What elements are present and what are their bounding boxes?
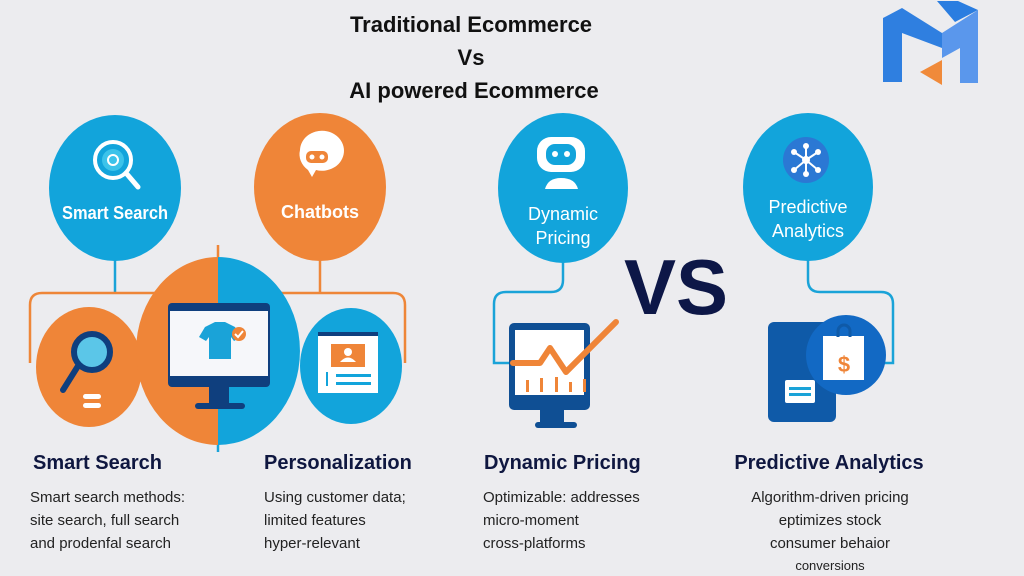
- circle: right small blue (profile): [300, 308, 402, 424]
- text: Predictive Analytics: Algorithm-driven pricing: [751, 489, 909, 506]
- text: Predictive Analytics: Predictive Analytics: [734, 452, 924, 474]
- text: Dynamic Pricing: micro-moment: [483, 512, 580, 529]
- title: AI powered Ecommerce: [349, 78, 599, 103]
- circle: Chatbots: Chatbots: [281, 202, 359, 222]
- text: Smart Search: [30, 452, 185, 552]
- text: Dynamic Pricing: Dynamic Pricing: [484, 452, 641, 474]
- text: Dynamic Pricing: cross-platforms: [483, 535, 586, 552]
- circle: Smart Search: [49, 115, 181, 261]
- connector lines left: [30, 245, 405, 452]
- text: Predictive Analytics: [734, 452, 924, 573]
- circle: Predictive Analytics: Predictive: [768, 197, 848, 217]
- text: Predictive Analytics: eptimizes stock: [779, 512, 882, 529]
- circle: big split (personalization monitor): [136, 257, 300, 445]
- logo: [883, 1, 978, 85]
- circle: Dynamic Pricing: Pricing: [535, 228, 591, 248]
- text: Personalization: [264, 452, 412, 552]
- circle: Predictive Analytics: Analytics: [772, 221, 844, 241]
- text: Dynamic Pricing: [483, 452, 641, 552]
- text: Smart Search: Smart search methods:: [30, 489, 185, 506]
- title: Traditional Ecommerce: [350, 12, 592, 37]
- text: Personalization: Using customer data;: [264, 489, 406, 506]
- title: [349, 12, 599, 103]
- text: Dynamic Pricing: Optimizable: addresses: [483, 489, 640, 506]
- text: Smart Search: Smart Search: [33, 452, 162, 474]
- circle: left small orange (search): [36, 307, 142, 427]
- text: Personalization: hyper-relevant: [264, 535, 361, 552]
- text: Predictive Analytics: consumer behaior: [770, 535, 890, 552]
- connector lines right: [494, 260, 893, 363]
- text: Smart Search: site search, full search: [30, 512, 179, 529]
- text: Smart Search: and prodenfal search: [30, 535, 171, 552]
- VS: VS: [624, 243, 728, 331]
- icon: shopping bag on tablet: $: [838, 352, 850, 377]
- icon: shopping bag on tablet: [768, 315, 886, 422]
- circle: Dynamic Pricing: Dynamic: [528, 204, 598, 224]
- text: Personalization: Personalization: [264, 452, 412, 474]
- circle: Predictive Analytics: [743, 113, 873, 261]
- text: Predictive Analytics: conversions: [795, 558, 865, 573]
- circle: Dynamic Pricing: [498, 113, 628, 263]
- title: Vs: [458, 45, 484, 70]
- text: Personalization: limited features: [264, 512, 366, 529]
- icon: pricing monitor: [509, 322, 616, 428]
- circle: Smart Search: Smart Search: [62, 203, 168, 223]
- circle: Chatbots: [254, 113, 386, 261]
